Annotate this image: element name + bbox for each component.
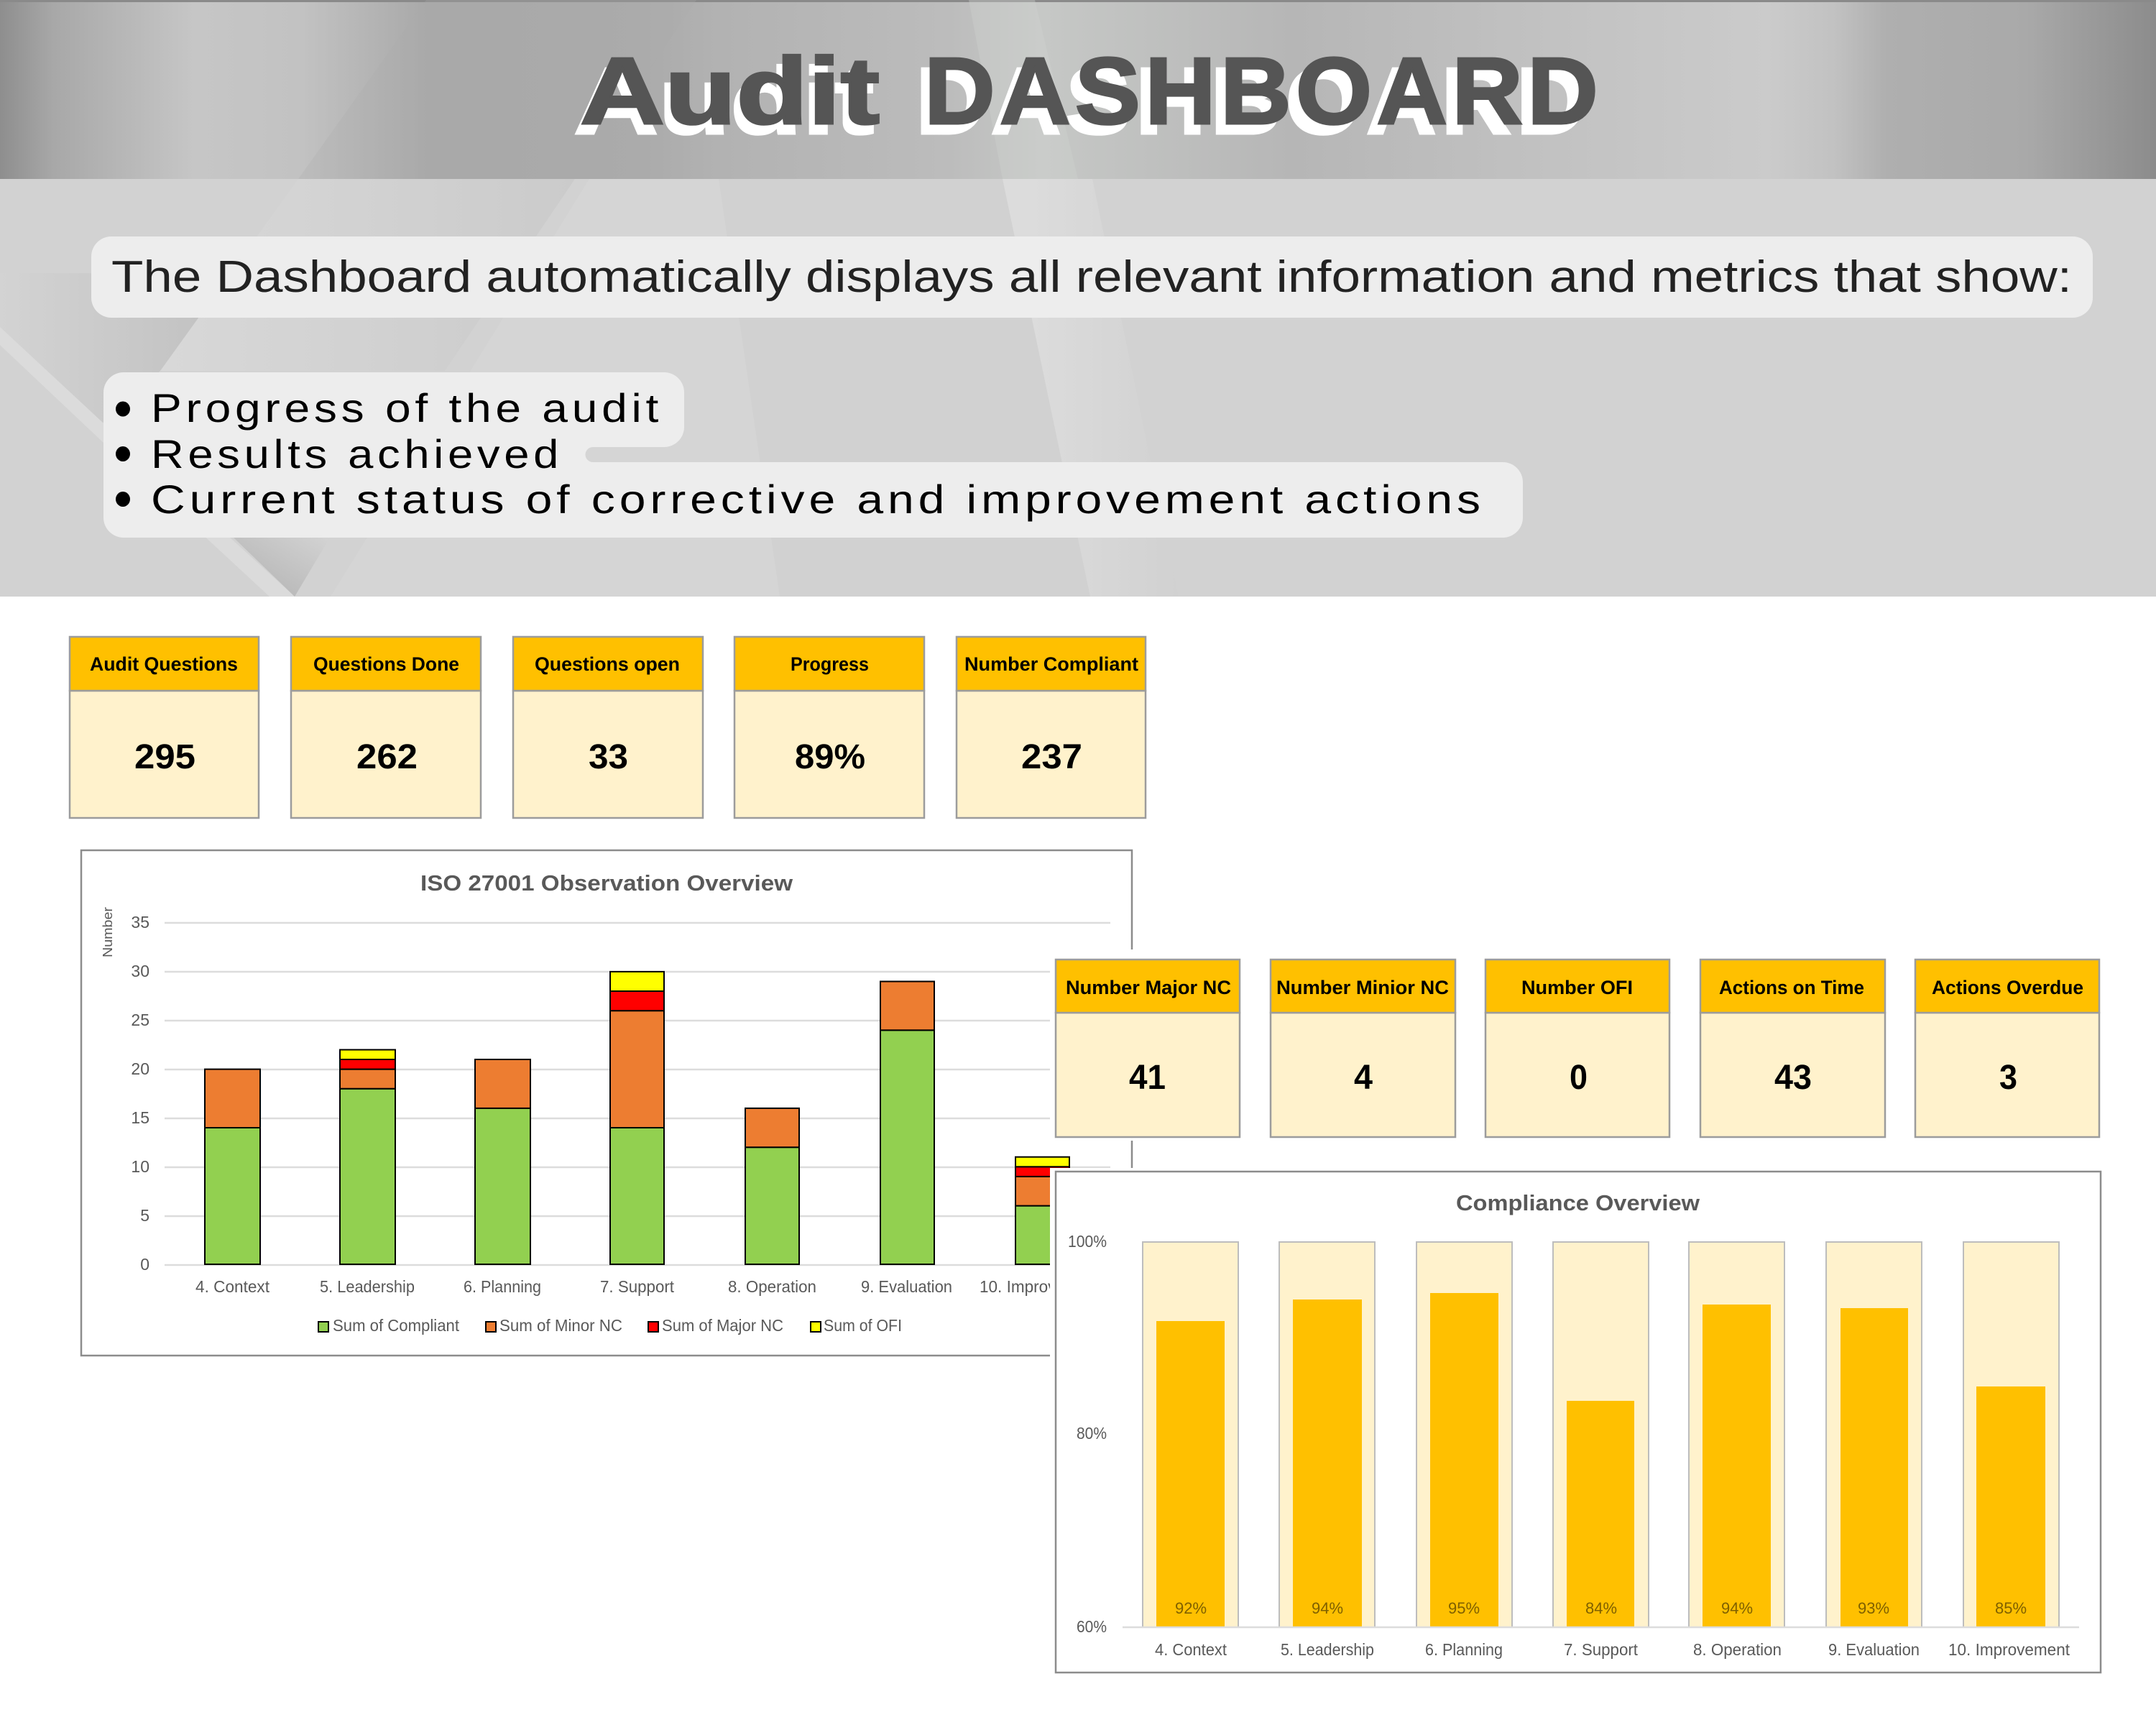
- card: number OFI: [1485, 960, 1669, 1137]
- x axis labels: [1155, 1640, 2070, 1659]
- x axis labels: 7. Support: [600, 1277, 675, 1296]
- x axis labels: 4. Context: [195, 1277, 270, 1296]
- card: audit questions: [70, 637, 259, 818]
- x axis labels: 9. Evaluation: [1828, 1640, 1920, 1659]
- bar: 4. Context: [205, 1070, 260, 1264]
- card: actions on time: Actions on Time: [1719, 977, 1864, 998]
- bar: 7. Support: [610, 972, 664, 1264]
- card: progress: Progress: [791, 653, 869, 675]
- chart title: ISO 27001 Observation Overview: [420, 870, 793, 896]
- card: questions done: Questions Done: [313, 653, 459, 675]
- title: Audit: [573, 48, 874, 154]
- card: actions on time: 43: [1774, 1059, 1812, 1097]
- chart: ISO 27001 observation overview: [81, 850, 1132, 1356]
- legend: Sum of OFI: [824, 1316, 902, 1335]
- title: DASHBOARD: [916, 48, 1591, 154]
- bullet list pill: Results achieved: [151, 431, 563, 477]
- y axis labels: 80%: [1077, 1424, 1107, 1443]
- bar: 4. Context 92%: 92%: [1175, 1599, 1207, 1617]
- title: [573, 38, 1603, 154]
- intro text pill: [91, 236, 2093, 318]
- metric cards row 1: [70, 637, 1146, 818]
- white backing for compliance chart: [1050, 1168, 2114, 1680]
- card: questions done: 262: [356, 738, 418, 776]
- card: number OFI: Number OFI: [1521, 977, 1633, 998]
- bar: 5. Leadership 94%: [1279, 1242, 1375, 1627]
- card: actions overdue: 3: [1999, 1059, 2017, 1097]
- x axis labels: 6. Planning: [1425, 1640, 1503, 1659]
- bar: 6. Planning: [475, 1059, 530, 1264]
- card: questions done: [291, 637, 481, 818]
- y axis labels: [1068, 1232, 1107, 1636]
- x axis labels: 8. Operation: [1693, 1640, 1782, 1659]
- y axis labels: 60%: [1077, 1617, 1107, 1636]
- gridlines and y axis: 5: [140, 1206, 149, 1225]
- bar: 4. Context 92%: [1143, 1242, 1238, 1627]
- gridlines and y axis: 10: [131, 1157, 149, 1176]
- gridlines and y axis: 0: [140, 1255, 149, 1274]
- card: audit questions: 295: [134, 738, 195, 776]
- chart: compliance overview: [1056, 1172, 2101, 1673]
- intro text pill: The Dashboard automatically displays all relevant information and metrics that show:: [111, 252, 2072, 302]
- legend: [318, 1316, 902, 1335]
- bullet list pill: Current status of corrective and improvement actions: [151, 477, 1485, 522]
- bar: 7. Support 84%: [1553, 1242, 1649, 1627]
- x axis labels: [195, 1277, 1102, 1296]
- card: actions on time: [1700, 960, 1885, 1137]
- x axis labels: 6. Planning: [464, 1277, 541, 1296]
- bar: 10. Improvement: [1015, 1157, 1069, 1264]
- bar: 8. Operation 94%: [1689, 1242, 1784, 1627]
- legend: Sum of Major NC: [662, 1316, 783, 1335]
- gridlines and y axis: 25: [131, 1011, 149, 1029]
- card: number minor NC: [1271, 960, 1455, 1137]
- card: questions open: Questions open: [535, 653, 680, 675]
- legend: Sum of Compliant: [333, 1316, 460, 1335]
- card: number compliant: [957, 637, 1146, 818]
- x axis labels: 10. Improvement: [980, 1277, 1102, 1296]
- card: questions open: [513, 637, 703, 818]
- bar: 10. Improvement 85%: 85%: [1995, 1599, 2027, 1617]
- card: number minor NC: Number Minior NC: [1276, 977, 1449, 998]
- legend: Sum of Minor NC: [499, 1316, 622, 1335]
- bar: 8. Operation: [745, 1108, 799, 1264]
- title: Audit: [580, 38, 880, 144]
- bar: 9. Evaluation: [880, 982, 934, 1264]
- x axis labels: 9. Evaluation: [861, 1277, 952, 1296]
- card: number compliant: Number Compliant: [964, 653, 1138, 675]
- intro background: [0, 179, 2156, 597]
- bar: 9. Evaluation 93%: [1826, 1242, 1922, 1627]
- chart title: Compliance Overview: [1456, 1190, 1700, 1215]
- gridlines and y axis: 20: [131, 1059, 149, 1078]
- card: questions open: 33: [589, 738, 628, 776]
- x axis labels: 10. Improvement: [1948, 1640, 2070, 1659]
- card: progress: 89%: [795, 738, 865, 776]
- gridlines and y axis: 15: [131, 1108, 149, 1127]
- card: number major NC: Number Major NC: [1066, 977, 1231, 998]
- metric cards row 2: [1056, 960, 2099, 1137]
- bar: 10. Improvement 85%: [1963, 1242, 2059, 1627]
- x axis labels: 7. Support: [1564, 1640, 1639, 1659]
- x axis labels: 5. Leadership: [320, 1277, 415, 1296]
- bar: 6. Planning 95%: [1416, 1242, 1512, 1627]
- gridlines and y axis: [131, 913, 1110, 1274]
- x axis labels: 5. Leadership: [1281, 1640, 1374, 1659]
- card: number OFI: 0: [1570, 1059, 1588, 1097]
- card: number minor NC: 4: [1354, 1059, 1373, 1097]
- white backing for cards row 2: [1050, 949, 2114, 1141]
- x axis labels: 8. Operation: [728, 1277, 816, 1296]
- header background: [0, 0, 2156, 179]
- card: audit questions: Audit Questions: [90, 653, 238, 675]
- card: number compliant: 237: [1021, 738, 1082, 776]
- gridlines and y axis: 30: [131, 962, 149, 980]
- card: actions overdue: Actions Overdue: [1932, 977, 2083, 998]
- bar: 5. Leadership 94%: 94%: [1312, 1599, 1343, 1617]
- y axis title: Number: [101, 907, 115, 957]
- card: progress: [734, 637, 924, 818]
- bullet list pill: Progress of the audit: [151, 385, 663, 431]
- y axis labels: 100%: [1068, 1232, 1107, 1251]
- title: DASHBOARD: [924, 38, 1603, 144]
- x axis labels: 4. Context: [1155, 1640, 1227, 1659]
- card: number major NC: 41: [1129, 1059, 1166, 1097]
- gridlines and y axis: 35: [131, 913, 149, 932]
- bullet list pill: [103, 372, 1523, 538]
- card: number major NC: [1056, 960, 1240, 1137]
- bar: 8. Operation 94%: 94%: [1721, 1599, 1753, 1617]
- bar: 9. Evaluation 93%: 93%: [1858, 1599, 1889, 1617]
- bar: 6. Planning 95%: 95%: [1448, 1599, 1480, 1617]
- card: actions overdue: [1915, 960, 2099, 1137]
- bar: 7. Support 84%: 84%: [1585, 1599, 1617, 1617]
- bar: 5. Leadership: [340, 1049, 395, 1264]
